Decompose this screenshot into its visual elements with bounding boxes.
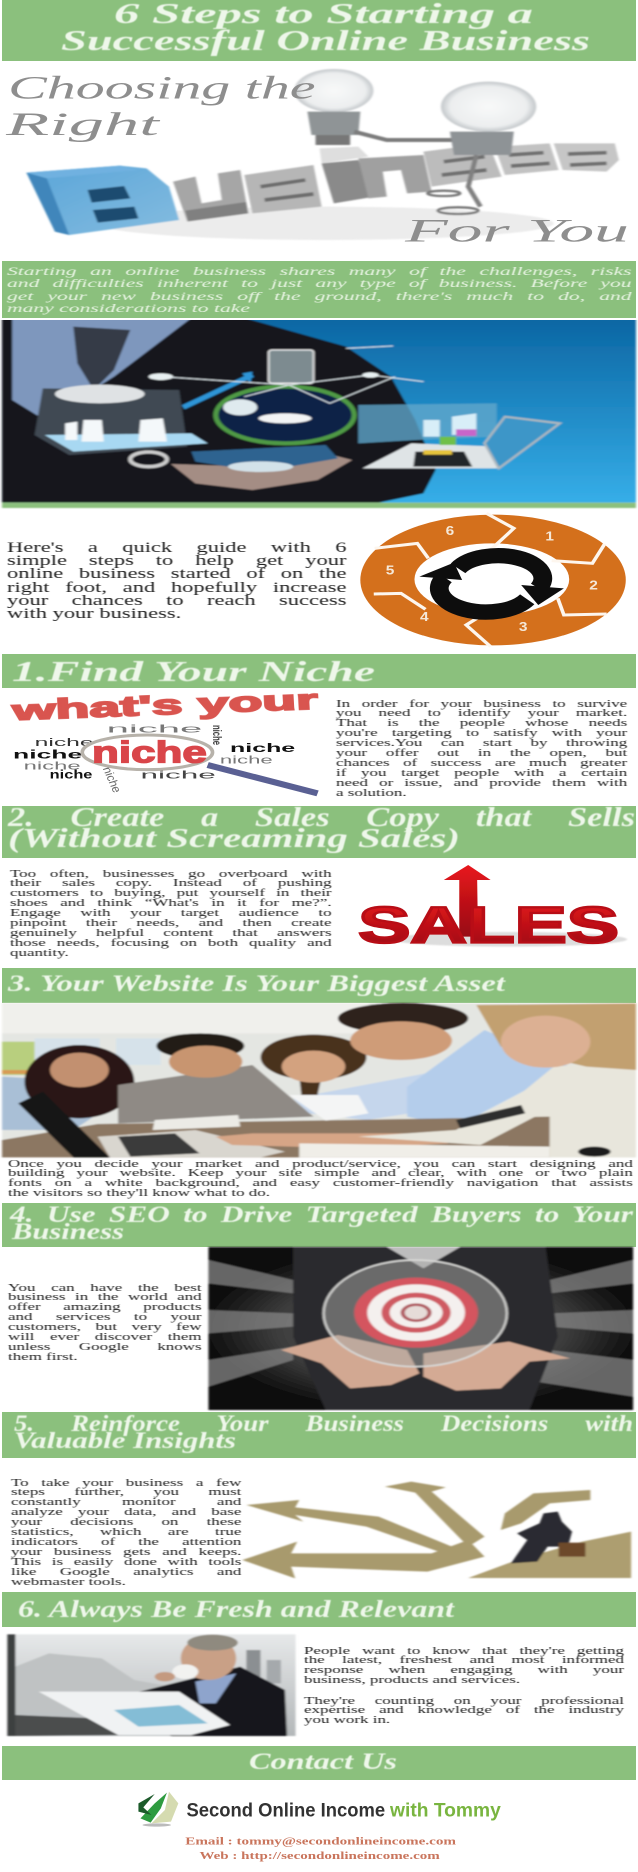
diagram: six step orange cycle: 6 bbox=[446, 523, 454, 538]
illustration: sales arrow: SALES bbox=[358, 897, 619, 953]
text: step 5 paragraph bbox=[10, 1478, 242, 1588]
illustration: what's your niche: niche bbox=[24, 759, 81, 772]
text: step 4 paragraph: unless Google knows bbox=[8, 1342, 202, 1353]
text: step 4 paragraph: business in the world and bbox=[8, 1292, 202, 1303]
contact details: Email : tommy@secondonlineincome.com bbox=[185, 1835, 456, 1847]
text: step 6 paragraph two: you work in. bbox=[304, 1715, 390, 1726]
contact banner bbox=[2, 1746, 636, 1780]
illustration: what's your niche: what's your bbox=[10, 684, 319, 726]
text: quick guide paragraph: online business started of on the bbox=[7, 566, 346, 582]
illustration: what's your niche: niche bbox=[13, 748, 82, 761]
text: quick guide paragraph: right foot, and hopefully increase bbox=[7, 580, 346, 596]
text: step 5 paragraph: This is easily done with tools bbox=[11, 1557, 241, 1568]
illustration: what's your niche: niche bbox=[35, 736, 94, 749]
heading: step 2 bbox=[2, 802, 636, 858]
logo: Second Online Income with Tommy bbox=[138, 1792, 501, 1827]
illustration: what's your niche: niche bbox=[140, 768, 216, 781]
illustration: what's your niche: niche bbox=[230, 741, 295, 755]
text: step 1 paragraph: if you target people with a certain bbox=[336, 768, 627, 779]
text: step 1 paragraph: need or issue, and provide them with bbox=[336, 778, 627, 789]
text: step 6 paragraph two: They're counting on your professional bbox=[304, 1696, 624, 1706]
heading: step 4 bbox=[2, 1202, 636, 1247]
illustration: what's your niche: niche bbox=[92, 736, 207, 770]
illustration: sales arrow bbox=[358, 865, 628, 953]
illustration: choosing the right business: Choosing the bbox=[8, 70, 316, 106]
illustration: what's your niche: niche bbox=[220, 753, 273, 766]
text: step 5 paragraph: statistics, which are true bbox=[11, 1527, 241, 1538]
text: step 4 paragraph: customers, but very few bbox=[8, 1322, 202, 1333]
illustration: choosing the right business: Right bbox=[4, 106, 160, 142]
text: step 5 paragraph: like Google analytics and bbox=[11, 1567, 241, 1578]
text: step 5 paragraph: your business gets and keeps. bbox=[11, 1547, 241, 1558]
text: step 3 paragraph bbox=[7, 1158, 634, 1199]
heading: step 5 bbox=[2, 1411, 636, 1458]
text: step 3 paragraph: building your website. Keep your site simple and clear, with one or two plain bbox=[8, 1168, 633, 1179]
text: step 5 paragraph: analyze your data, and base bbox=[11, 1507, 241, 1518]
photo: hands holding a target bbox=[206, 1246, 635, 1412]
text: step 2 paragraph: genuinely helpful content that answers bbox=[10, 928, 332, 939]
text: step 6 paragraph two bbox=[304, 1696, 625, 1726]
text: quick guide paragraph: Here's a quick guide with 6 bbox=[7, 540, 346, 556]
heading: step 5: Valuable Insights bbox=[14, 1428, 236, 1453]
text: step 4 paragraph: and services to your bbox=[8, 1312, 202, 1323]
diagram: six step orange cycle bbox=[360, 512, 626, 648]
text: step 5 paragraph: To take your business a few bbox=[11, 1478, 241, 1488]
text: step 2 paragraph: shoes and think “What's in it for me?”. bbox=[10, 898, 332, 909]
illustration: choosing the right business bbox=[4, 68, 629, 249]
text: quick guide paragraph bbox=[6, 540, 348, 622]
title banner bbox=[2, 0, 636, 61]
text: intro paragraph: Starting an online business shares many of the challenges, risks bbox=[7, 264, 632, 278]
photo: man reading a newspaper bbox=[6, 1633, 297, 1738]
text: quick guide paragraph: with your business. bbox=[7, 606, 181, 622]
heading: step 3: 3. Your Website Is Your Biggest Asset bbox=[7, 971, 506, 996]
heading: step 2: 2. Create a Sales Copy that Sells bbox=[7, 802, 635, 832]
text: step 2 paragraph: Too often, businesses go overboard with bbox=[10, 868, 332, 880]
diagram: six step orange cycle: 3 bbox=[519, 619, 528, 634]
photo: team around a laptop bbox=[0, 1002, 638, 1159]
intro banner bbox=[2, 261, 636, 318]
heading: step 2: (Without Screaming Sales) bbox=[8, 823, 460, 853]
text: step 6 paragraph one: People want to know that they're getting bbox=[304, 1646, 624, 1656]
logo: Second Online Income with Tommy: Second Online Income bbox=[186, 1799, 385, 1821]
text: step 6 paragraph one bbox=[303, 1646, 625, 1686]
text: step 4 paragraph: You can have the best bbox=[8, 1282, 202, 1294]
heading: step 6: 6. Always Be Fresh and Relevant bbox=[18, 1597, 456, 1623]
text: step 4 paragraph: offer amazing products bbox=[8, 1302, 202, 1313]
text: step 5 paragraph: steps further, you must bbox=[11, 1487, 241, 1498]
text: step 5 paragraph: indicators of the attention bbox=[11, 1537, 241, 1548]
text: step 6 paragraph two: expertise and knowledge of the industry bbox=[304, 1705, 624, 1716]
heading: step 3 bbox=[2, 968, 636, 1003]
heading: step 6 bbox=[2, 1592, 636, 1627]
illustration: businessman holding digital world bbox=[0, 320, 638, 509]
text: quick guide paragraph: simple steps to help get your bbox=[7, 553, 346, 569]
contact details: Web : http://secondonlineincome.com bbox=[200, 1849, 440, 1862]
text: step 1 paragraph: That is the people whose needs bbox=[336, 718, 627, 729]
text: step 2 paragraph: customers to buying, put yourself in their bbox=[10, 888, 332, 899]
text: step 1 paragraph: your offer out in the open, but bbox=[336, 748, 627, 759]
text: step 3 paragraph: the visitors so they'll know what to do. bbox=[8, 1188, 270, 1199]
text: step 1 paragraph bbox=[336, 698, 628, 799]
text: step 6 paragraph one: response when engaging with your bbox=[304, 1665, 624, 1676]
heading: step 1: 1.Find Your Niche bbox=[12, 656, 375, 688]
illustration: what's your niche: niche bbox=[50, 768, 92, 781]
text: step 2 paragraph: their sales copy. Instead of pushing bbox=[10, 878, 332, 889]
illustration: what's your niche bbox=[10, 684, 319, 796]
text: step 5 paragraph: your decisions on these bbox=[11, 1517, 241, 1528]
illustration: what's your niche: niche bbox=[100, 766, 123, 794]
text: step 2 paragraph: pinpoint their needs, and then create bbox=[10, 918, 332, 929]
heading: step 5: 5. Reinforce Your Business Decisions with bbox=[14, 1411, 633, 1436]
text: intro paragraph bbox=[6, 264, 632, 315]
diagram: six step orange cycle: 2 bbox=[589, 578, 598, 592]
contact banner: Contact Us bbox=[249, 1749, 397, 1774]
diagram: six step orange cycle: 5 bbox=[386, 563, 395, 577]
illustration: choosing the right business: For You bbox=[403, 213, 629, 249]
text: step 1 paragraph: a solution. bbox=[336, 788, 407, 799]
text: step 2 paragraph: those needs, focusing on both quality and bbox=[10, 938, 332, 949]
text: step 4 paragraph: will ever discover them bbox=[8, 1332, 202, 1343]
text: step 3 paragraph: fonts on a white background, and easy customer-friendly navigation that assists bbox=[8, 1178, 633, 1189]
text: step 3 paragraph: Once you decide your market and product/service, you can start designing and bbox=[8, 1158, 633, 1170]
text: intro paragraph: many considerations to take bbox=[7, 301, 250, 315]
illustration: what's your niche: niche bbox=[210, 725, 223, 745]
diagram: six step orange cycle: 1 bbox=[545, 529, 554, 543]
heading: step 4: Business bbox=[11, 1219, 124, 1244]
illustration: crossroads arrows and businessman bbox=[242, 1480, 633, 1579]
text: step 1 paragraph: you're targeting to satisfy with your bbox=[336, 728, 627, 739]
text: step 2 paragraph bbox=[10, 868, 332, 959]
heading: step 1 bbox=[2, 654, 636, 688]
text: step 1 paragraph: services.You can start by throwing bbox=[336, 738, 627, 749]
text: step 5 paragraph: webmaster tools. bbox=[11, 1577, 126, 1588]
text: step 2 paragraph: quantity. bbox=[10, 948, 69, 959]
text: step 4 paragraph: them first. bbox=[8, 1352, 78, 1363]
text: step 1 paragraph: chances of success are much greater bbox=[336, 758, 627, 769]
text: step 1 paragraph: you need to identify your market. bbox=[336, 708, 627, 719]
text: intro paragraph: and difficulties inherent to just any type of business. Before you bbox=[7, 276, 632, 290]
text: step 1 paragraph: In order for your business to survive bbox=[336, 698, 627, 710]
diagram: six step orange cycle: 4 bbox=[420, 609, 429, 624]
text: step 5 paragraph: constantly monitor and bbox=[11, 1497, 241, 1508]
text: step 4 paragraph bbox=[7, 1282, 202, 1363]
text: step 6 paragraph one: the latest, freshest and most informed bbox=[304, 1655, 624, 1666]
text: intro paragraph: get your new business off the ground, there's much to do, and bbox=[7, 289, 632, 303]
text: step 2 paragraph: Engage with your target audience to bbox=[10, 908, 332, 919]
illustration: what's your niche: niche bbox=[107, 723, 202, 735]
text: quick guide paragraph: your chances to reach success bbox=[7, 593, 346, 609]
heading: step 4: 4. Use SEO to Drive Targeted Buyers to Your bbox=[9, 1202, 634, 1227]
contact details bbox=[185, 1835, 456, 1862]
text: step 6 paragraph one: business, products and services. bbox=[304, 1675, 520, 1686]
title banner: Successful Online Business bbox=[61, 25, 590, 57]
